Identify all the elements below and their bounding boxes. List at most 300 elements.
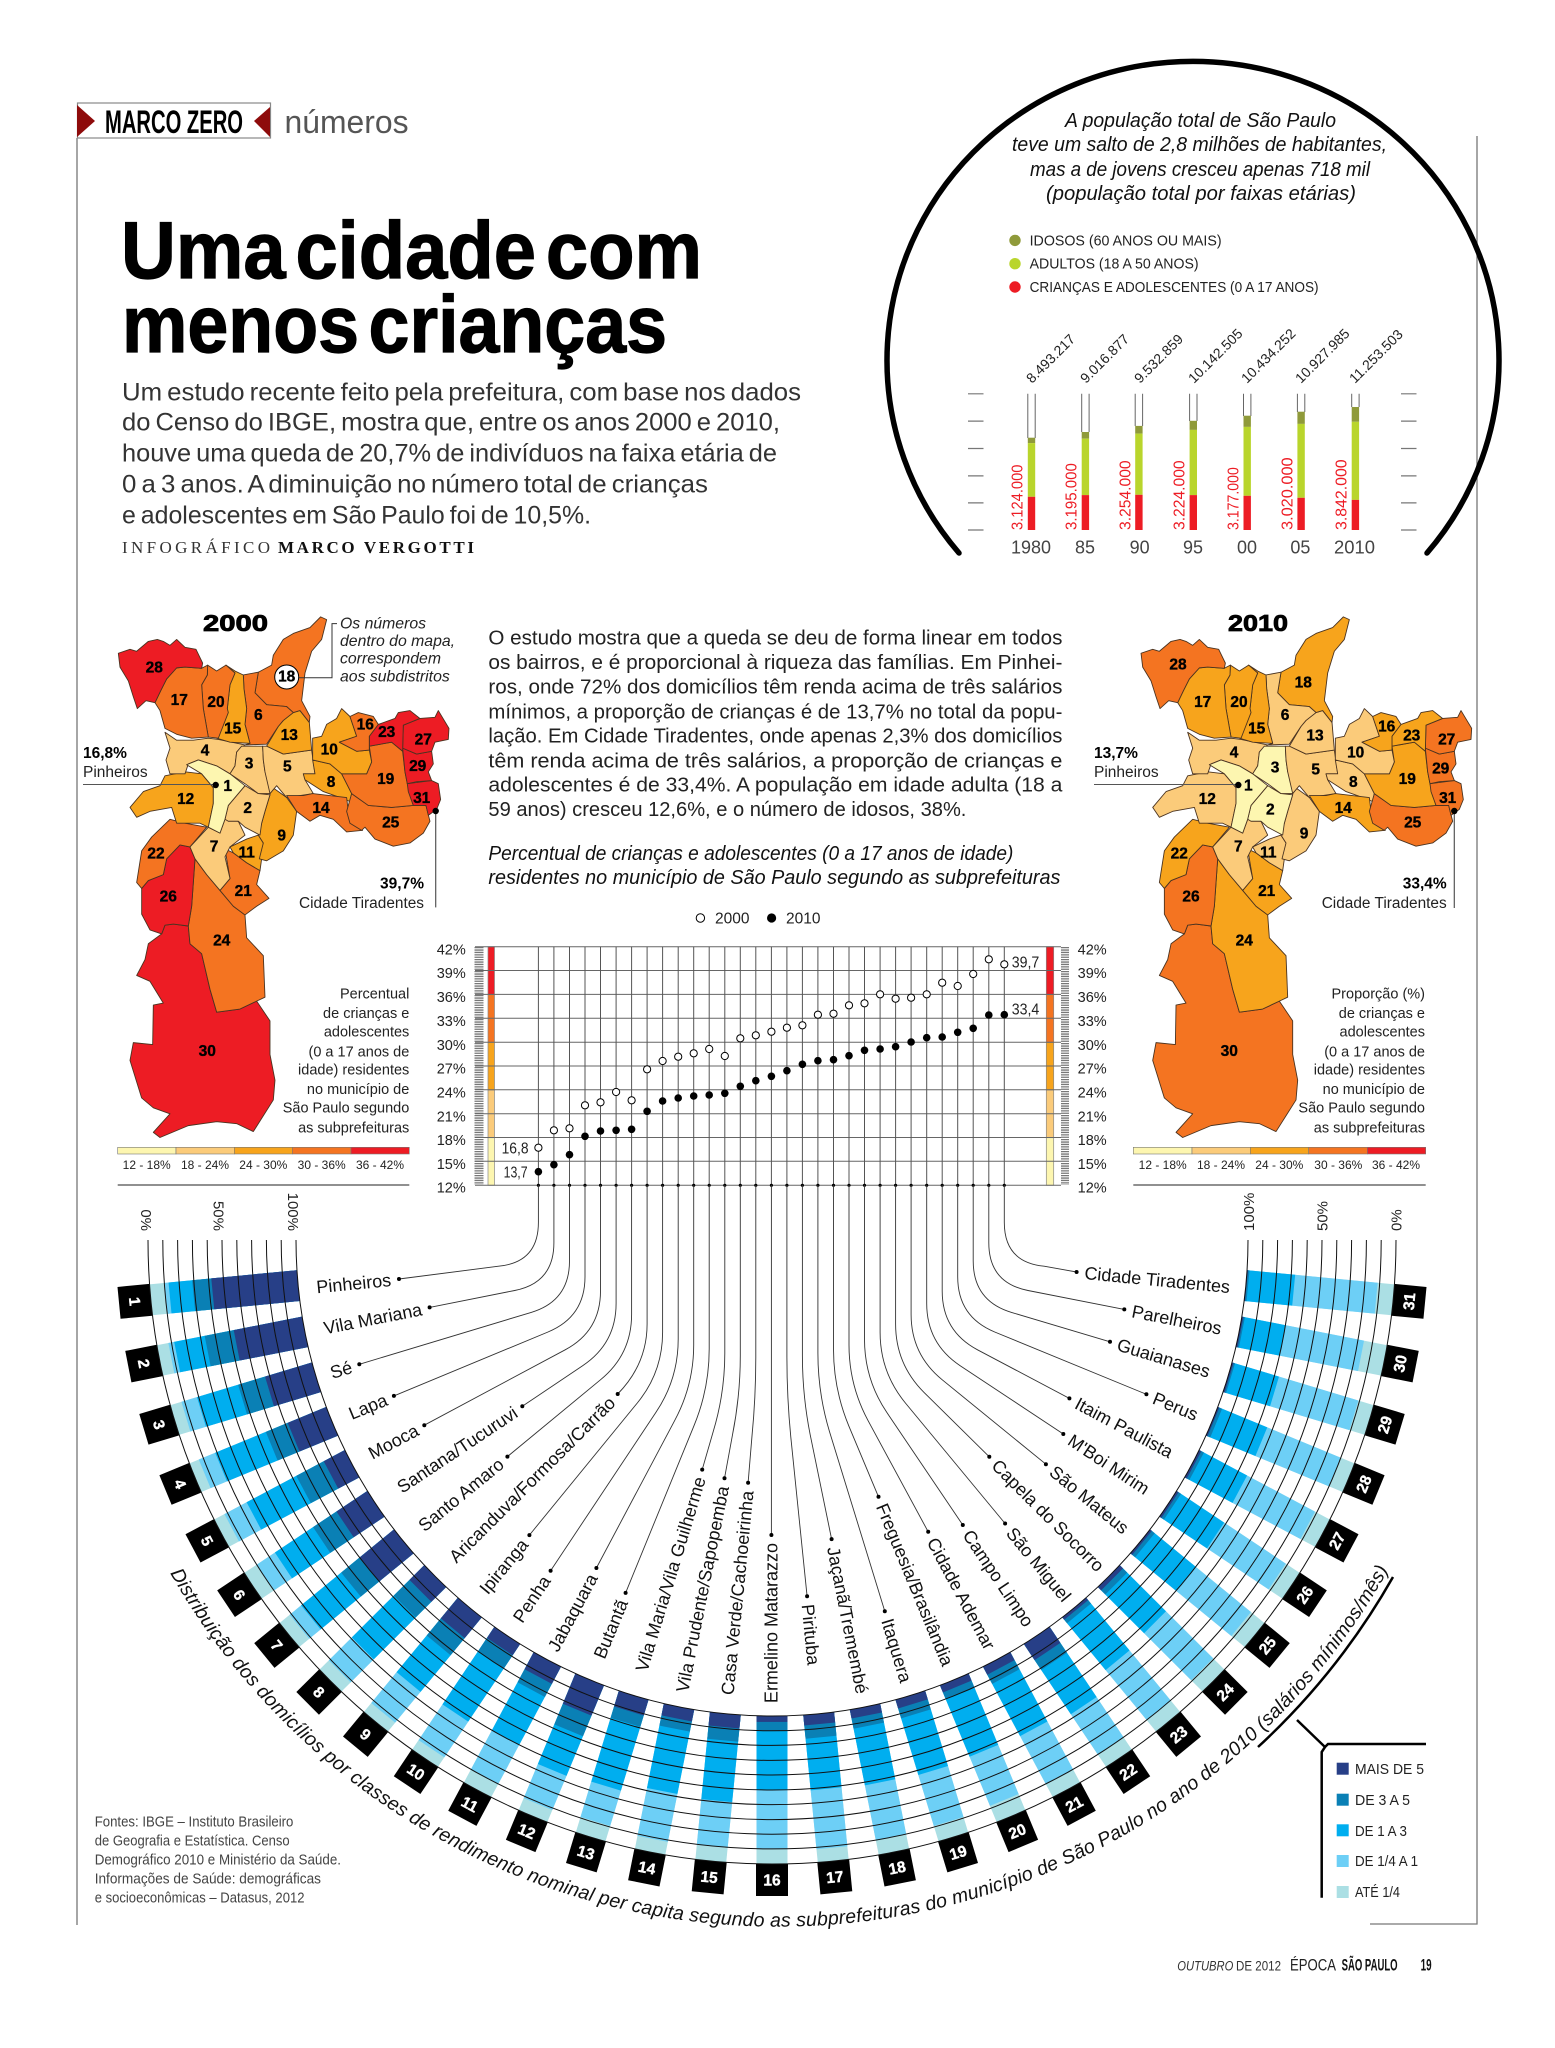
bar 2: 2: [134, 1358, 152, 1370]
region numbers 2010: 13: [1306, 728, 1324, 744]
map note 2000: (0 a 17 anos de: [309, 1044, 409, 1060]
years: 85: [1075, 536, 1095, 558]
map note 2000: no município de: [307, 1082, 409, 1098]
bar 6: [217, 1491, 385, 1617]
region numbers 2010: 14: [1335, 800, 1352, 817]
bar 27: [1185, 1450, 1359, 1562]
axis labels right: 12%: [1078, 1181, 1107, 1197]
subprefecture labels: Santo Amaro: [415, 1454, 508, 1536]
region numbers 2000: 14: [312, 800, 330, 817]
callout Cidade Tiradentes 2010: 33,4%: [1403, 875, 1447, 892]
axis labels left: 33%: [437, 1014, 466, 1030]
base dots: [537, 1184, 1006, 1187]
region numbers 2010: 23: [1403, 728, 1421, 744]
bar 4: [159, 1407, 338, 1505]
map note 2010: idade) residentes: [1314, 1063, 1425, 1079]
region numbers 2010: 8: [1349, 774, 1358, 791]
intro paragraph: Um estudo recente feito pela prefeitura, com base nos dados: [122, 379, 801, 407]
map 2000: [83, 610, 455, 1185]
region numbers 2010: 10: [1347, 744, 1364, 762]
region numbers 2010: 28: [1169, 656, 1187, 674]
subprefecture labels: Vila Prudente/Sapopemba: [672, 1483, 733, 1694]
section header: Marco Zero números: [77, 103, 408, 140]
region numbers 2010: 24: [1236, 932, 1253, 950]
subprefecture labels: M'Boi Mirim: [1064, 1430, 1153, 1499]
curved chart caption: Distribuição dos domicílios por classes de rendimento nominal per capita segundo as subprefeituras do município de São Paulo no ano de 2010 (salários mínimos/mês): [170, 1566, 1389, 1929]
region numbers 2010: 26: [1182, 888, 1200, 906]
choropleth regions 2010: [1141, 617, 1472, 1137]
rotated totals: 9.016.877: [1077, 331, 1132, 386]
page footer: [1177, 1955, 1432, 1975]
axis labels left: 15%: [437, 1157, 466, 1173]
axis labels left: 18%: [437, 1133, 466, 1149]
subprefecture labels: Mooca: [365, 1420, 423, 1463]
bar 9: [343, 1598, 482, 1757]
region numbers 2010: 19: [1399, 771, 1416, 788]
red values: [1010, 457, 1350, 530]
region numbers 2010: 1: [1244, 778, 1253, 794]
title: menos crianças: [122, 280, 667, 370]
bar 14: [628, 1704, 695, 1886]
map note 2010: as subprefeituras: [1314, 1120, 1425, 1136]
bar 12: 12: [515, 1821, 538, 1843]
color scale 2000: 30 - 36%: [298, 1158, 346, 1172]
bar 3: [139, 1362, 321, 1445]
red values: 3.224.000: [1172, 460, 1188, 530]
region numbers 2010: 25: [1404, 815, 1422, 832]
bar 23: [1062, 1598, 1201, 1757]
bar 8: 8: [309, 1684, 328, 1702]
radial bars: [117, 1270, 1427, 1896]
bar 30: [1236, 1316, 1419, 1382]
subprefecture labels: Guaianases: [1115, 1335, 1212, 1382]
sources: Fontes: IBGE – Instituto Brasileiro: [95, 1815, 293, 1831]
bar 1: [117, 1270, 300, 1319]
page footer: ÉPOCA: [1290, 1956, 1336, 1975]
bar 15: [692, 1712, 741, 1894]
axis labels right: 30%: [1078, 1038, 1107, 1054]
rotated totals: 10.142.505: [1185, 325, 1246, 386]
axis labels right: 33%: [1078, 1014, 1107, 1030]
map note 2000: adolescentes: [324, 1025, 409, 1041]
body text: [488, 627, 1063, 821]
percent scale labels: 100%: [284, 1193, 301, 1231]
callout Cidade Tiradentes 2000: 39,7%: [380, 875, 424, 892]
note: numbers correspond to subdistricts: dentro do mapa,: [340, 633, 455, 650]
map note 2010: São Paulo segundo: [1298, 1100, 1425, 1116]
bar 13: [566, 1691, 649, 1872]
color scale 2000: 36 - 42%: [356, 1158, 404, 1172]
region numbers 2000: 30: [199, 1043, 216, 1060]
region numbers 2010: 30: [1221, 1043, 1238, 1060]
color scale 2000: [118, 1147, 409, 1185]
region numbers 2010: 31: [1439, 790, 1457, 807]
region numbers 2000: 31: [413, 790, 431, 807]
region numbers 2010: 3: [1271, 759, 1280, 776]
subprefecture labels: Butantã: [590, 1596, 632, 1662]
bar 26: 26: [1294, 1583, 1318, 1607]
rotated totals: 11.253.503: [1346, 326, 1406, 386]
body text: mínimos, a proporção de crianças é de 13,7% no total da popu-: [488, 701, 1062, 723]
bar 16: [756, 1716, 788, 1896]
subprefecture labels: Ipiranga: [476, 1534, 533, 1598]
subprefecture labels: Ermelino Matarazzo: [762, 1543, 782, 1703]
note: numbers correspond to subdistricts: aos subdistritos: [340, 669, 450, 686]
bar 13: 13: [575, 1843, 597, 1864]
map heading: 2000: [203, 610, 268, 636]
region numbers 2010: 12: [1199, 791, 1216, 808]
bar 25: [1130, 1529, 1290, 1668]
subprefecture labels: São Mateus: [1046, 1462, 1133, 1538]
region numbers 2010: 5: [1311, 762, 1320, 778]
subprefecture labels: São Miguel: [1002, 1524, 1075, 1606]
map 2010: [1094, 610, 1472, 1185]
region numbers 2010: 16: [1378, 718, 1396, 736]
bar 7: 7: [267, 1637, 285, 1655]
axis labels right: 39%: [1078, 966, 1107, 982]
region numbers 2000: 11: [239, 844, 255, 861]
bar 1: 1: [125, 1296, 143, 1307]
color scale 2000: 18 - 24%: [181, 1158, 229, 1172]
rotated totals: 9.532.859: [1131, 331, 1186, 386]
byline: INFOGRÁFICO: [122, 538, 270, 557]
income legend: DE 1/4 A 1: [1355, 1854, 1418, 1870]
bar 5: [185, 1450, 359, 1562]
bar 23: 23: [1167, 1723, 1191, 1747]
callout Cidade Tiradentes 2000: [299, 808, 439, 912]
stacked bars: [1028, 394, 1359, 530]
bar 31: [1244, 1270, 1427, 1319]
color scale 2010: 30 - 36%: [1314, 1158, 1363, 1172]
region numbers 2010: 6: [1281, 707, 1290, 724]
color strips: [488, 947, 1054, 1185]
region numbers 2000: 6: [254, 707, 263, 724]
percent scale labels: 50%: [1315, 1201, 1332, 1231]
bar 12: [506, 1674, 604, 1852]
title: Uma cidade com: [121, 206, 702, 296]
bar 10: 10: [404, 1761, 427, 1785]
bar 11: 11: [458, 1794, 481, 1817]
bar 19: [895, 1691, 978, 1872]
axis labels left: 27%: [437, 1062, 466, 1078]
region numbers 2000: 25: [382, 815, 400, 832]
radial income chart: 31 subprefectures: [118, 1185, 1426, 1929]
axis labels right: 27%: [1078, 1062, 1107, 1078]
percent scale labels: [137, 1193, 1406, 1231]
subprefecture labels: Santana/Tucuruvi: [393, 1403, 521, 1497]
choropleth regions 2000: [118, 617, 449, 1137]
bar 17: 17: [825, 1869, 844, 1887]
map note 2010: Proporção (%): [1332, 986, 1425, 1002]
callout Pinheiros 2000: Pinheiros: [83, 764, 148, 781]
years: [1011, 536, 1375, 558]
region numbers 2000: 9: [277, 828, 286, 845]
callout Cidade Tiradentes 2010: [1322, 808, 1458, 912]
axis labels right: 21%: [1078, 1109, 1107, 1125]
bar 4: 4: [170, 1477, 189, 1492]
region numbers 2010: 7: [1234, 838, 1243, 856]
bar 3: 3: [149, 1418, 168, 1432]
body text: 59 anos) cresceu 12,6%, e o número de idosos, 38%.: [488, 799, 966, 821]
region numbers 2010: 29: [1432, 760, 1450, 778]
arch outline: [887, 61, 1499, 553]
bar 29: [1223, 1362, 1405, 1445]
callout Pinheiros 2010: Pinheiros: [1094, 764, 1159, 781]
subprefecture labels: Cidade Tiradentes: [1084, 1263, 1231, 1297]
subprefecture labels: Sé: [328, 1357, 355, 1383]
bar 10: [394, 1627, 520, 1794]
axis labels right: [1078, 942, 1107, 1197]
region numbers 2000: 7: [210, 838, 218, 856]
axis labels left: 12%: [437, 1181, 466, 1197]
red values: 3.842.000: [1334, 459, 1350, 530]
scale ticks: [968, 394, 1416, 530]
subprefecture labels: Pinheiros: [315, 1270, 392, 1297]
percent scale labels: 0%: [137, 1209, 154, 1231]
color scale 2010: 12 - 18%: [1139, 1158, 1187, 1172]
section header: Marco Zero números: MARCO ZERO: [105, 104, 243, 140]
bar 27: 27: [1326, 1530, 1349, 1553]
region numbers 2010: 20: [1230, 694, 1248, 711]
bar 6: 6: [229, 1587, 248, 1604]
value labels: 33,4: [1012, 1001, 1040, 1018]
axis labels right: 15%: [1078, 1157, 1107, 1173]
years: 00: [1237, 536, 1257, 558]
body text: têm renda acima de três salários, a proporção de crianças e: [488, 750, 1062, 772]
bar 11: [448, 1652, 561, 1826]
body text: adolescentes é de 33,4%. A população em idade adulta (18 a: [488, 775, 1063, 797]
body text: os bairros, e é proporcional à riqueza das famílias. Em Pinhei-: [488, 652, 1062, 674]
bar 18: [849, 1704, 916, 1886]
region numbers 2000: 2: [243, 800, 252, 817]
subprefecture labels: [315, 1263, 1231, 1703]
page footer: DE 2012: [1236, 1958, 1281, 1974]
section header: Marco Zero números: números: [284, 104, 408, 140]
subprefecture labels: Perus: [1150, 1388, 1201, 1425]
axis labels left: 30%: [437, 1038, 466, 1054]
callout Pinheiros 2010: 13,7%: [1094, 745, 1138, 762]
subprefecture labels: Itaquera: [877, 1616, 916, 1686]
byline: MARCO VERGOTTI: [278, 538, 474, 557]
subprefecture labels: Pirituba: [798, 1603, 824, 1667]
income legend: DE 3 A 5: [1355, 1793, 1410, 1809]
axis labels left: 36%: [437, 990, 466, 1006]
region numbers 2000: 10: [321, 742, 338, 758]
years: 95: [1183, 536, 1203, 558]
region numbers 2000: 20: [207, 694, 225, 711]
income legend: MAIS DE 5: [1355, 1762, 1424, 1778]
region numbers 2000: 3: [245, 756, 254, 772]
region numbers 2010: 17: [1194, 694, 1211, 711]
map note 2000: de crianças e: [323, 1006, 409, 1022]
page footer: SÃO PAULO: [1342, 1955, 1398, 1975]
income legend: [1297, 1720, 1426, 1901]
bar 7: [254, 1529, 414, 1668]
bar 9: 9: [356, 1726, 374, 1745]
bar 15: 15: [700, 1869, 719, 1887]
bar 24: 24: [1214, 1680, 1238, 1705]
axis labels left: 39%: [437, 966, 466, 982]
chart heading: [488, 843, 1060, 889]
age legend: IDOSOS (60 ANOS OU MAIS): [1030, 233, 1222, 249]
region numbers 2000: 13: [281, 727, 298, 744]
bar 26: [1159, 1491, 1327, 1617]
map note 2000: Percentual: [340, 986, 409, 1002]
body text: lação. Em Cidade Tiradentes, onde apenas 2,3% dos domicílios: [488, 726, 1062, 748]
panel heading: teve um salto de 2,8 milhões de habitantes,: [1012, 134, 1387, 156]
region numbers 2010: 22: [1171, 846, 1188, 862]
grid: [475, 947, 1061, 1185]
subprefecture labels: Capela do Socorro: [988, 1456, 1108, 1576]
region numbers 2000: 16: [357, 716, 374, 734]
bar 16: 16: [763, 1872, 781, 1890]
byline: [122, 538, 474, 557]
value labels: 16,8: [502, 1140, 529, 1157]
bar 30: 30: [1391, 1354, 1411, 1374]
bar 2: [125, 1316, 308, 1382]
map note 2000: São Paulo segundo: [283, 1100, 409, 1116]
map note 2010: adolescentes: [1340, 1025, 1425, 1041]
page footer: 19: [1421, 1957, 1432, 1975]
region numbers 2010: 4: [1230, 744, 1239, 762]
percent scale labels: 100%: [1241, 1193, 1258, 1231]
panel heading: A população total de São Paulo: [1064, 110, 1336, 132]
intro paragraph: [122, 379, 801, 529]
map heading: 2010: [1228, 610, 1288, 636]
age legend: [1009, 233, 1319, 296]
age legend: ADULTOS (18 A 50 ANOS): [1030, 257, 1199, 273]
dot plot legend: [696, 910, 821, 928]
bar 21: 21: [1063, 1793, 1087, 1817]
age legend: CRIANÇAS E ADOLESCENTES (0 A 17 ANOS): [1030, 280, 1319, 296]
region numbers 2010: 9: [1300, 826, 1309, 842]
region numbers 2000: 1: [223, 778, 232, 795]
callout Cidade Tiradentes 2010: Cidade Tiradentes: [1322, 895, 1447, 912]
years: 90: [1130, 536, 1150, 558]
intro paragraph: houve uma queda de 20,7% de indivíduos na faixa etária de: [122, 440, 777, 468]
region numbers 2010: 11: [1260, 844, 1277, 861]
axis labels right: 36%: [1078, 990, 1107, 1006]
subprefecture labels: Parelheiros: [1130, 1301, 1223, 1339]
callout Pinheiros 2000: [83, 745, 219, 788]
region numbers 2010: 2: [1266, 802, 1275, 818]
region numbers 2010: 18: [1295, 674, 1312, 692]
panel heading: mas a de jovens cresceu apenas 718 mil: [1030, 159, 1371, 181]
dot plot legend: 2000: [715, 910, 750, 928]
map note 2010: (0 a 17 anos de: [1324, 1044, 1425, 1060]
caption underline: [1258, 1577, 1393, 1747]
sources: Informações de Saúde: demográficas: [95, 1871, 321, 1887]
axis labels left: 42%: [437, 942, 466, 958]
color scale 2000: 24 - 30%: [239, 1158, 288, 1172]
bar 19: 19: [948, 1843, 969, 1864]
bar 29: 29: [1375, 1414, 1396, 1436]
note: numbers correspond to subdistricts: [299, 615, 455, 686]
bar 5: 5: [197, 1534, 216, 1549]
subprefecture labels: Casa Verde/Cachoeirinha: [718, 1489, 758, 1696]
years: 05: [1290, 536, 1310, 558]
page frame lines: [77, 136, 1477, 1925]
map note 2000: idade) residentes: [298, 1063, 409, 1079]
callout Pinheiros 2000: 16,8%: [83, 745, 127, 762]
axis labels right: 24%: [1078, 1086, 1107, 1102]
bar 17: [803, 1712, 852, 1894]
bar 18: 18: [887, 1859, 908, 1879]
region numbers 2000: 26: [160, 888, 177, 906]
region numbers 2000: 19: [377, 771, 395, 788]
subprefecture labels: Itaim Paulista: [1072, 1394, 1177, 1463]
region numbers 2010: 27: [1438, 732, 1455, 749]
panel heading: [1012, 110, 1387, 205]
callout Pinheiros 2010: [1094, 745, 1242, 788]
color scale 2010: 18 - 24%: [1197, 1158, 1245, 1172]
chart heading: Percentual de crianças e adolescentes (0 a 17 anos de idade): [488, 843, 1013, 865]
axis labels left: [437, 942, 466, 1197]
leader lines: [359, 1185, 1146, 1611]
rotated totals: 10.927.985: [1292, 325, 1353, 386]
page footer: OUTUBRO: [1177, 1958, 1233, 1974]
bar 21: [983, 1652, 1096, 1826]
region numbers 2000: 4: [201, 742, 210, 760]
dot plot: percent by subprefecture: [437, 910, 1107, 1197]
bar 24: [1098, 1565, 1248, 1715]
map note 2010: de crianças e: [1339, 1006, 1425, 1022]
region numbers 2000: 5: [283, 758, 292, 776]
map note 2000: [283, 986, 409, 1136]
region numbers 2000: 22: [147, 846, 165, 862]
map note 2010: [1298, 986, 1425, 1136]
red values: 3.020.000: [1280, 457, 1296, 530]
body text: O estudo mostra que a queda se deu de forma linear em todos: [488, 627, 1062, 649]
region numbers 2000: 12: [177, 791, 194, 808]
subprefecture labels: Vila Mariana: [322, 1299, 425, 1338]
series 2000: [535, 956, 1008, 1151]
sources: e socioeconômicas – Datasus, 2012: [95, 1891, 304, 1907]
intro paragraph: e adolescentes em São Paulo foi de 10,5%.: [122, 501, 591, 529]
percent scale labels: 0%: [1389, 1209, 1406, 1231]
region numbers 2000: 17: [171, 692, 188, 709]
sources: [95, 1815, 341, 1907]
bar 14: 14: [637, 1859, 657, 1879]
chart heading: residentes no município de São Paulo segundo as subprefeituras: [488, 867, 1060, 889]
color scale 2010: [1133, 1147, 1426, 1185]
bar 20: [940, 1674, 1038, 1852]
sources: de Geografia e Estatística. Censo: [95, 1834, 290, 1850]
region numbers 2000: 15: [224, 720, 242, 738]
years: 2010: [1334, 536, 1375, 558]
subprefecture labels: Aricanduva/Formosa/Carrão: [445, 1393, 619, 1567]
sources: Demográfico 2010 e Ministério da Saúde.: [95, 1852, 341, 1868]
title: [121, 206, 702, 370]
bar 20: 20: [1006, 1821, 1029, 1843]
intro paragraph: 0 a 3 anos. A diminuição no número total de crianças: [122, 470, 708, 498]
bar 8: [296, 1565, 446, 1715]
region numbers 2000: 8: [327, 774, 336, 791]
region numbers 2000: 23: [378, 724, 396, 741]
region numbers 2010: 21: [1258, 883, 1276, 900]
bar 28: 28: [1353, 1473, 1376, 1495]
subprefecture labels: Penha: [509, 1571, 555, 1626]
body text: ros, onde 72% dos domicílios têm renda acima de três salários: [488, 676, 1062, 698]
bar 31: 31: [1401, 1292, 1419, 1311]
subprefecture labels: Jaçanã/Tremembé: [823, 1545, 872, 1695]
color scale 2010: 24 - 30%: [1255, 1158, 1304, 1172]
subprefecture labels: Jabaquara: [544, 1570, 602, 1655]
rotated totals: 10.434.252: [1238, 325, 1299, 386]
red values: 3.254.000: [1118, 460, 1134, 530]
region numbers 2000: 27: [415, 732, 432, 749]
map note 2000: as subprefeituras: [298, 1120, 409, 1136]
